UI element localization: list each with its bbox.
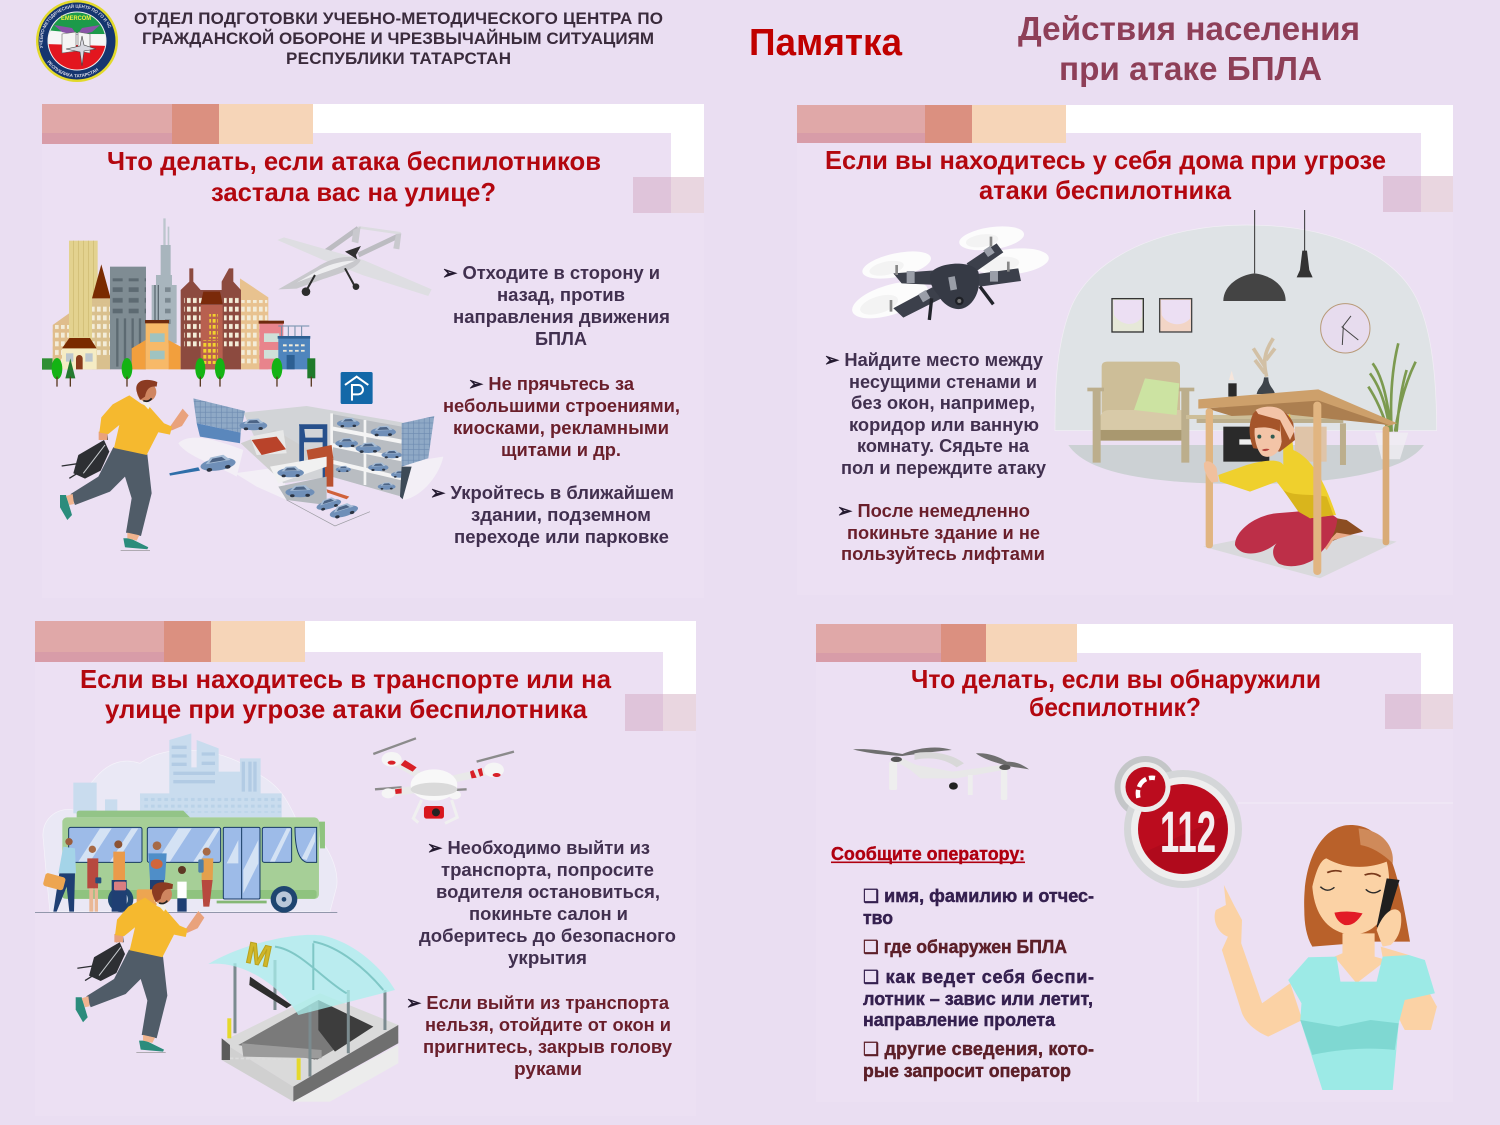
illustration: running person (transport) xyxy=(76,882,204,1053)
panel: at home xyxy=(797,105,1453,595)
header: organisation name: РЕСПУБЛИКИ ТАТАРСТАН xyxy=(286,49,511,68)
logo emblem xyxy=(36,0,118,82)
text block: outdoor advice xyxy=(430,262,680,547)
illustration: metro entrance xyxy=(208,935,398,1102)
logo emblem: EMERCOM xyxy=(61,15,91,22)
heading: in transport: улице при угрозе атаки беспилотника xyxy=(105,694,588,724)
text block: home advice: несущими стенами и xyxy=(849,371,1037,392)
text block: report to operator: рые запросит оператор xyxy=(863,1061,1071,1081)
illustration: white drone xyxy=(853,748,1029,800)
text block: home advice: без окон, например, xyxy=(851,392,1035,413)
heading: in transport: Если вы находитесь в транспорте или на xyxy=(80,664,612,694)
illustration: woman calling xyxy=(1215,825,1437,1090)
text block: report to operator: Сообщите оператору: xyxy=(831,843,1025,864)
heading: in transport xyxy=(80,664,612,724)
small table and objects xyxy=(1186,338,1346,465)
text block: outdoor advice: БПЛА xyxy=(535,328,587,349)
text block: report to operator: ❑ имя, фамилию и отчес- xyxy=(863,886,1094,906)
text block: transport advice: водителя остановиться, xyxy=(436,881,660,902)
text block: outdoor advice: киосками, рекламными xyxy=(453,417,669,438)
armchair xyxy=(1087,362,1194,463)
text block: outdoor advice: ➢ Не прячьтесь за xyxy=(468,373,635,394)
illustration: parking building xyxy=(169,398,443,526)
logo emblem: РЕСПУБЛИКА ТАТАРСТАН xyxy=(47,60,98,78)
panel corner frame: outdoors xyxy=(42,104,704,213)
text block: outdoor advice: ➢ Укройтесь в ближайшем xyxy=(430,482,674,503)
illustration: woman under table xyxy=(1198,389,1397,578)
panel: drone discovered xyxy=(816,624,1453,1102)
heading: drone discovered: беспилотник? xyxy=(1029,692,1201,722)
text block: transport advice: ➢ Необходимо выйти из xyxy=(427,837,650,858)
text block: home advice: пол и переждите атаку xyxy=(841,457,1047,478)
subtitle: population actions: при атаке БПЛА xyxy=(1059,50,1322,87)
text block: report to operator: направление пролета xyxy=(863,1010,1056,1030)
text block: report to operator xyxy=(831,843,1094,1081)
text block: transport advice: транспорта, попросите xyxy=(441,859,654,880)
text block: transport advice: укрытия xyxy=(508,947,587,968)
heading: at home xyxy=(825,145,1386,205)
panel corner frame: at home xyxy=(797,105,1453,212)
text block: outdoor advice: ➢ Отходите в сторону и xyxy=(442,262,660,283)
icon: wall pictures xyxy=(1112,299,1192,332)
icon: wall clock xyxy=(1321,304,1370,353)
heading: drone discovered xyxy=(911,664,1321,722)
text block: outdoor advice: направления движения xyxy=(453,306,670,327)
illustration: surveillance UAV xyxy=(277,227,432,296)
icon: emergency number 112 badge: 112 xyxy=(1160,800,1216,865)
text block: report to operator: ❑ где обнаружен БПЛА xyxy=(863,937,1067,957)
illustration: running person xyxy=(60,380,189,550)
illustration: room background xyxy=(1055,210,1437,484)
illustration: black quadcopter xyxy=(848,223,1050,326)
icon: emergency number 112 badge xyxy=(1114,756,1242,888)
illustration: white drone with red stripes xyxy=(373,738,514,823)
heading: outdoors: Что делать, если атака беспилотников xyxy=(107,146,601,176)
subtitle: population actions xyxy=(1018,10,1360,87)
text block: outdoor advice: щитами и др. xyxy=(501,439,621,460)
text block: report to operator: ❑ другие сведения, кото- xyxy=(863,1039,1094,1059)
text block: transport advice: покиньте салон и xyxy=(469,903,628,924)
heading: outdoors: застала вас на улице? xyxy=(211,177,496,207)
heading: at home: Если вы находитесь у себя дома при угрозе xyxy=(825,145,1386,175)
header: organisation name: ОТДЕЛ ПОДГОТОВКИ УЧЕБНО-МЕТОДИЧЕСКОГО ЦЕНТРА ПО xyxy=(134,9,663,28)
header: organisation name xyxy=(134,9,663,68)
text block: outdoor advice: небольшими строениями, xyxy=(443,395,680,416)
heading: at home: атаки беспилотника xyxy=(979,175,1232,205)
panel: in transport xyxy=(35,621,696,1116)
text block: transport advice: нельзя, отойдите от окон и xyxy=(425,1014,671,1035)
text block: home advice: комнату. Сядьте на xyxy=(857,435,1030,456)
text block: home advice xyxy=(824,349,1047,564)
text block: transport advice: пригнитесь, закрыв голову xyxy=(423,1036,673,1057)
text block: outdoor advice: назад, против xyxy=(497,284,625,305)
illustration: city skyline xyxy=(42,218,315,387)
illustration: bus at stop xyxy=(35,733,337,913)
text block: home advice: коридор или ванную xyxy=(849,414,1039,435)
text block: report to operator: тво xyxy=(863,908,893,928)
text block: home advice: пользуйтесь лифтами xyxy=(841,543,1045,564)
waiting passengers xyxy=(43,838,213,912)
text block: report to operator: ❑ как ведет себя беспи- xyxy=(863,967,1094,987)
text block: report to operator: лотник – завис или летит, xyxy=(863,989,1093,1009)
text block: home advice: ➢ После немедленно xyxy=(837,500,1030,521)
text block: home advice: ➢ Найдите место между xyxy=(824,349,1044,370)
text block: home advice: покиньте здание и не xyxy=(847,522,1040,543)
heading: outdoors xyxy=(107,146,601,207)
text block: outdoor advice: переходе или парковке xyxy=(454,526,669,547)
panel corner frame: in transport xyxy=(35,621,696,731)
text block: transport advice: руками xyxy=(514,1058,582,1079)
header: organisation name: ГРАЖДАНСКОЙ ОБОРОНЕ И ЧРЕЗВЫЧАЙНЫМ СИТУАЦИЯМ xyxy=(142,29,654,48)
panel corner frame: drone discovered xyxy=(816,624,1453,729)
subtitle: population actions: Действия населения xyxy=(1018,10,1360,47)
icon: parking sign xyxy=(341,372,373,404)
title: memo: Памятка xyxy=(749,22,903,64)
text block: transport advice xyxy=(406,837,676,1079)
icon: ceiling lamps xyxy=(1223,210,1313,301)
text block: outdoor advice: здании, подземном xyxy=(471,504,651,525)
potted plant xyxy=(1368,343,1416,459)
panel: outdoors xyxy=(42,104,704,598)
text block: transport advice: ➢ Если выйти из транспорта xyxy=(406,992,670,1013)
illustration: metro entrance: M xyxy=(243,937,274,974)
text block: transport advice: доберитесь до безопасного xyxy=(419,925,676,946)
heading: drone discovered: Что делать, если вы обнаружили xyxy=(911,664,1321,694)
logo emblem: УЧЕБНО-МЕТОДИЧЕСКИЙ ЦЕНТР ПО ГО И ЧС xyxy=(39,4,112,48)
